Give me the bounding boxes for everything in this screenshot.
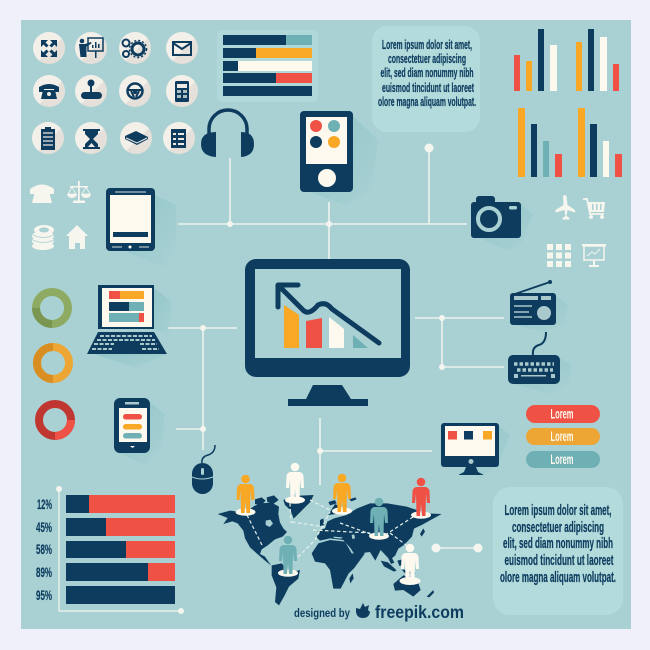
- icon: central monitor with chart: [245, 259, 410, 406]
- icon: scales: [67, 181, 91, 203]
- icon: envelope: [173, 42, 191, 55]
- icon: laptop: [87, 285, 172, 368]
- text bubble top: elit, sed diam nonummy nibh: [380, 66, 474, 80]
- text bubble top: [372, 26, 480, 132]
- icon grid: round icons: [32, 32, 198, 154]
- donut: red: [39, 404, 71, 436]
- icon: presentation board: [582, 244, 606, 267]
- person: red: [412, 478, 430, 516]
- icon: grid: [547, 244, 571, 267]
- connector lines: [168, 144, 504, 485]
- person: white Australia: [401, 544, 419, 582]
- icon: camera: [471, 196, 533, 250]
- white icons: phone, scales, coins, house: [30, 181, 91, 250]
- percent labels: 89%: [36, 564, 52, 580]
- icon: gears: [122, 40, 146, 58]
- node pair connector: [432, 544, 482, 552]
- icon: telephone: [39, 84, 59, 99]
- percent labels: [36, 496, 52, 603]
- text bubble top: olore magna aliquam volutpat.: [378, 95, 476, 109]
- icon: joystick: [81, 80, 102, 99]
- person: teal Asia: [370, 498, 388, 536]
- bar chart panel top: [217, 30, 318, 102]
- icon: steering wheel: [128, 84, 142, 98]
- icon: tablet: [106, 188, 176, 268]
- icon: presenter: [79, 38, 103, 58]
- credit logo: designed by: [294, 608, 350, 620]
- icon: mouse: [192, 445, 215, 494]
- credit logo: [294, 602, 464, 622]
- icon: expand arrows: [41, 40, 57, 57]
- donut: orange: [37, 347, 69, 379]
- stacked bar chart bottom left: [36, 486, 184, 614]
- icon: house: [66, 225, 88, 249]
- map: Eurasia, Africa and Australia: [312, 497, 442, 597]
- credit logo: freepik.com: [375, 602, 464, 622]
- icon: plane: [556, 195, 575, 220]
- map: Americas and Greenland: [218, 495, 314, 605]
- icon: cart: [583, 199, 605, 219]
- person bases: [236, 496, 431, 585]
- donut: green: [36, 292, 68, 324]
- icon: clipboard: [41, 127, 55, 150]
- chart bars in monitor: [284, 305, 368, 348]
- person: orange centre: [333, 474, 351, 512]
- person: orange left: [236, 475, 254, 513]
- text bubble top: euismod tincidunt ut laoreet: [382, 81, 474, 95]
- icon: hourglass: [83, 129, 100, 149]
- legend pills: Lorem: [550, 451, 574, 467]
- icon: coins: [32, 225, 54, 250]
- icon: list sheet: [171, 129, 186, 148]
- person: teal South America: [279, 536, 297, 574]
- legend pills: [526, 405, 600, 468]
- icon: smartphone: [114, 398, 165, 465]
- text bubble bottom right: [493, 487, 623, 615]
- person: white: [286, 463, 304, 501]
- legend pills: Lorem: [550, 428, 574, 444]
- icon: media player: [300, 111, 378, 205]
- legend pills: Lorem: [550, 406, 574, 422]
- icon: freepik crown: [356, 603, 370, 618]
- icon: calculator: [175, 81, 189, 102]
- world map with people: [218, 463, 442, 605]
- percent labels: 45%: [36, 519, 52, 535]
- percent labels: 58%: [36, 541, 52, 557]
- icon: keyboard: [508, 332, 572, 394]
- trend arrow: [278, 285, 379, 343]
- percent labels: 12%: [37, 496, 52, 512]
- text bubble top: consectetuer adipiscing: [388, 52, 466, 66]
- icon: white telephone: [30, 184, 54, 203]
- percent labels: 95%: [36, 587, 52, 603]
- icon: headphones: [201, 110, 254, 157]
- icon: desktop computer: [441, 423, 510, 478]
- bar charts top right: [514, 29, 622, 177]
- text bubble top: Lorem ipsum dolor sit amet,: [382, 38, 472, 52]
- icon: radio: [510, 280, 568, 332]
- white icons: plane, cart, grid, presentation: [547, 195, 606, 267]
- dashed links: [247, 500, 413, 557]
- icon: book: [125, 131, 148, 145]
- bars: [66, 495, 175, 604]
